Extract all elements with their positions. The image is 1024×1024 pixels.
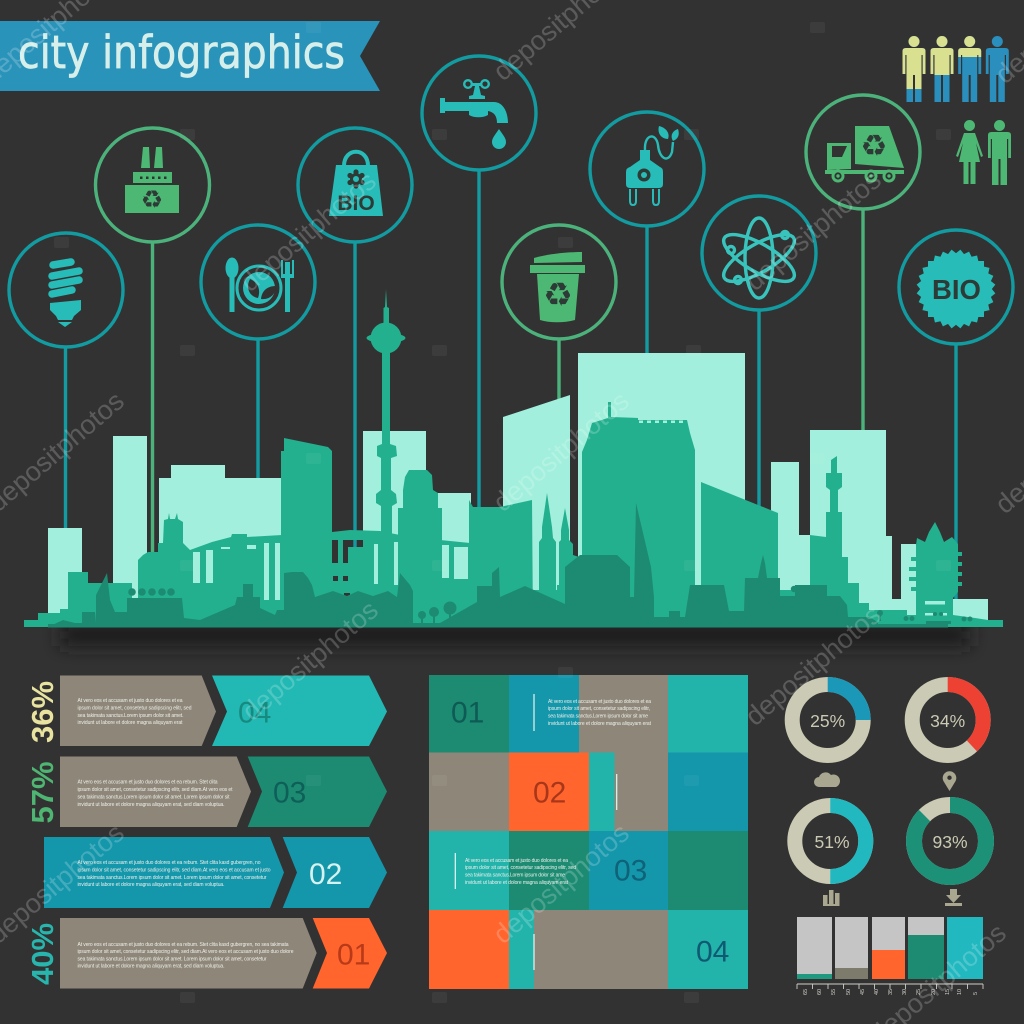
icon circle: factory recycling: ♻	[141, 185, 163, 214]
stock watermark overlay: depositphotos	[487, 818, 635, 950]
chart axis labels: 20	[931, 989, 937, 995]
mosaic grid panel	[429, 675, 748, 989]
mosaic grid panel: 02	[533, 776, 566, 810]
mosaic grid panel: sea takimata sanctus.Lorem ipsum dolor sit ame	[548, 714, 648, 720]
chart axis labels: 10	[957, 989, 963, 995]
icon: download	[945, 889, 962, 906]
icon: cloud	[814, 772, 840, 787]
chevron row 01: invidunt ut labore et dolore magna aliquyam erat, sed diam voluptua.	[78, 964, 224, 970]
chevron row 03: ipsum dolor sit amet, consetetur sadipscing elitr, sed diam.At vero eos et	[78, 787, 233, 793]
icon circle: bio plug	[590, 112, 704, 226]
mosaic grid panel: ipsum dolor sit amet, consetetur sadipscing elitr,	[548, 706, 650, 712]
mosaic grid panel: At vero eos et accusam et justo duo dolores et ea	[465, 858, 568, 864]
mosaic grid panel: 03	[614, 854, 647, 888]
observation tower	[366, 289, 406, 590]
chart axis labels: 65	[803, 989, 809, 995]
chevron row 03: At vero eos et accusam et justo duo dolores et ea rebum. Stet clita	[78, 780, 218, 786]
people pictogram: woman and man	[956, 120, 1011, 185]
chart axis labels: 55	[831, 989, 837, 995]
donut 25%: 25%	[810, 711, 845, 731]
building gaps and windows	[193, 420, 947, 616]
donut 25%	[792, 677, 871, 756]
donut 34%: 34%	[930, 711, 965, 731]
foreground dark buildings	[48, 503, 972, 628]
skyline shadow	[60, 624, 970, 646]
mosaic grid panel: sea takimata sanctus.Lorem ipsum dolor sit ame	[465, 872, 565, 878]
percent 40%: 40%	[25, 923, 60, 985]
percent 57%: 57%	[25, 761, 60, 824]
title banner: city infographics	[18, 26, 345, 79]
icon circle: bio shopping bag	[298, 128, 412, 242]
icon circle: factory recycling	[96, 128, 210, 242]
stock watermark overlay: depositphotos	[236, 595, 384, 727]
chevron row 02: ipsum dolor sit amet, consetetur sadipscing elitr, sed diam.At vero eos et accusam et justo	[78, 868, 271, 874]
chart axis labels: 25	[916, 989, 922, 995]
chart axis labels: 5	[973, 992, 979, 995]
donut 51%: 51%	[814, 832, 850, 852]
chevron row 01: ipsum dolor sit amet, consetetur sadipscing elitr, sed diam.At vero eos et accusam et justo duo dolore	[78, 949, 294, 955]
city skyline	[24, 289, 1003, 646]
stock watermark overlay: depositphotos	[487, 386, 635, 518]
icon circle: recycling bin	[502, 225, 616, 339]
chevron row 02: At vero eos et accusam et justo duo dolores et ea rebum. Stet clita kasd gubergren, no	[78, 860, 261, 866]
connector lines	[66, 170, 956, 600]
people pictogram: four men	[902, 36, 1009, 102]
chart axis labels: 45	[860, 989, 866, 995]
chevron row 03: sea takimata sanctus.Lorem ipsum dolor sit amet. Lorem ipsum dolor sit	[78, 794, 230, 800]
chevron row 04: ipsum dolor sit amet, consetetur sadipscing elitr, sed	[78, 706, 192, 712]
mosaic grid panel: invidunt ut labore et dolore magna aliquyam erat	[465, 880, 569, 886]
icon circle: bio badge	[899, 230, 1013, 344]
chevron row 04	[60, 676, 387, 746]
chevron row 01: At vero eos et accusam et justo duo dolores et ea rebum. Stet clita kasd gubergren, no sea takimata	[78, 942, 289, 948]
chevron row 02: sea takimata sanctus.Lorem ipsum dolor sit amet. Lorem ipsum dolor sit amet, consetetur	[78, 875, 267, 881]
icon circle: bio plate	[201, 225, 315, 339]
mosaic grid panel: ipsum dolor sit amet, consetetur sadipscing elitr, sed	[465, 865, 576, 871]
pale background buildings	[48, 353, 988, 621]
chart axis labels: 35	[888, 989, 894, 995]
chevron row 02	[44, 837, 387, 908]
chevron row 03: 03	[273, 776, 306, 810]
chart axis labels: 60	[817, 989, 823, 995]
chart axis labels: 40	[874, 989, 880, 995]
donut 93%	[906, 797, 994, 885]
donut 93%: 93%	[932, 832, 968, 852]
icon circle: water tap	[422, 56, 536, 170]
mosaic grid panel: At vero eos et accusam et justo duo dolores et ea	[548, 699, 651, 705]
icon circle: recycling truck: ♻	[861, 129, 887, 164]
stock watermark overlay: depositphotos	[234, 166, 382, 298]
chart axis labels	[803, 989, 979, 995]
chevron row 03: invidunt ut labore et dolore magna aliquyam erat, sed diam voluptua.	[78, 802, 224, 808]
icon circle: light bulb	[9, 233, 123, 347]
icon circle: bio badge: BIO	[932, 274, 981, 305]
icon: mini bars	[823, 890, 840, 906]
chevron row 04: 04	[238, 696, 271, 730]
icon circle: atom	[702, 196, 816, 310]
chart axis	[797, 984, 983, 989]
icon circle: bio shopping bag: BIO	[337, 192, 375, 215]
mosaic grid panel: 01	[451, 696, 484, 730]
chevron row 01: sea takimata sanctus.Lorem ipsum dolor sit amet. Lorem ipsum dolor sit amet, consetetur	[78, 956, 267, 962]
mid-tone buildings	[24, 402, 1003, 627]
stock watermark overlay: depositphotos	[739, 600, 887, 732]
chevron row 01	[60, 918, 387, 988]
chevron row 04: At vero eos et accusam et justo duo dolores et ea	[78, 698, 183, 704]
stock watermark overlay: depositphotos	[739, 165, 887, 297]
stacked bar chart	[797, 917, 983, 995]
chevron row 03	[60, 756, 387, 827]
chart axis labels: 50	[846, 989, 852, 995]
donut 51%	[795, 798, 873, 884]
chart axis labels: 30	[902, 989, 908, 995]
donut 34%	[912, 677, 991, 756]
icon circle: recycling bin: ♻	[543, 275, 573, 314]
percent 36%: 36%	[25, 681, 60, 743]
icon circle: recycling truck	[806, 95, 920, 209]
chart axis labels: 15	[945, 989, 951, 995]
chevron row 02: invidunt ut labore et dolore magna aliquyam erat, sed diam voluptua.	[78, 882, 224, 888]
chevron row 02: 02	[309, 858, 342, 891]
mosaic grid panel: invidunt ut labore et dolore magna aliquyam erat	[548, 721, 652, 727]
chevron row 01: 01	[337, 938, 370, 972]
icon: map pin	[943, 771, 956, 791]
chevron row 04: invidunt ut labore et dolore magna aliquyam erat	[78, 720, 183, 726]
chevron row 04: sea takimata sanctus.Lorem ipsum dolor sit amet.	[78, 713, 184, 719]
mosaic grid panel: 04	[696, 936, 729, 968]
